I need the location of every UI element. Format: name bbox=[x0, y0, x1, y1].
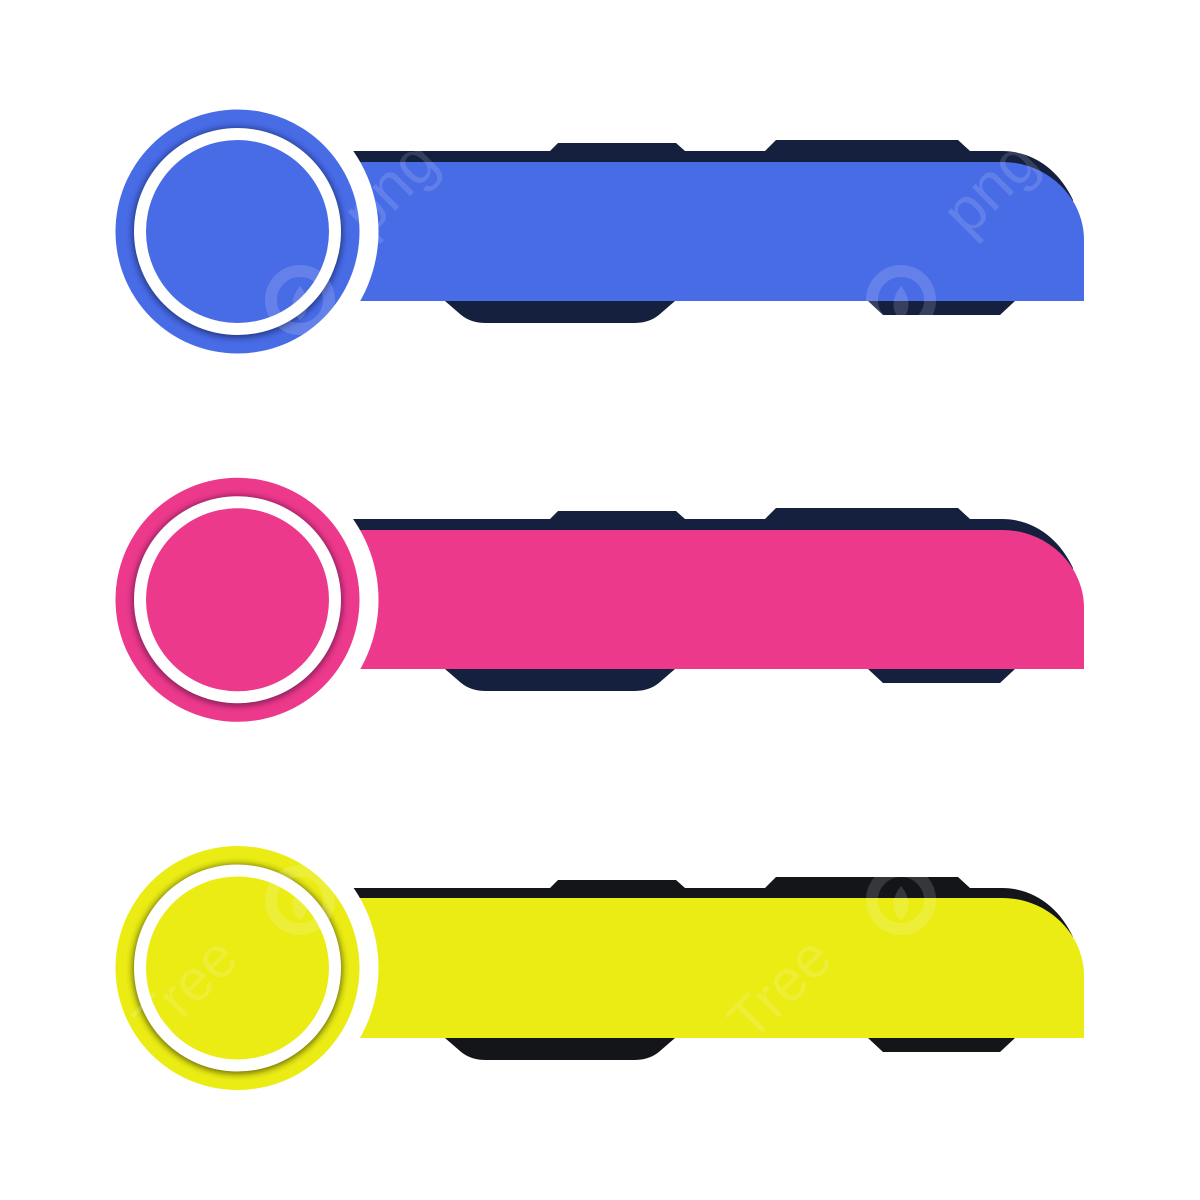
dark backing shape bbox=[340, 508, 1073, 691]
white ring bbox=[134, 864, 341, 1072]
white gap around badge bbox=[96, 459, 378, 741]
white gap around badge bbox=[96, 827, 378, 1109]
white ring bbox=[134, 496, 341, 703]
ribbon bbox=[340, 162, 1084, 301]
dark backing shape bbox=[340, 877, 1073, 1060]
watermark text: png left: png bbox=[329, 126, 451, 248]
inner ring shadow bbox=[132, 496, 342, 706]
watermark logo: yellow right bbox=[872, 871, 930, 929]
outer circle bbox=[116, 846, 360, 1090]
watermark logo: yellow left bbox=[271, 871, 329, 929]
banner: yellow bbox=[96, 827, 1084, 1109]
watermark logo: blue left bbox=[271, 271, 329, 329]
inner circle bbox=[146, 876, 329, 1060]
banner: blue bbox=[96, 90, 1084, 372]
dark backing shape bbox=[340, 140, 1073, 323]
ribbon bbox=[340, 898, 1084, 1038]
inner ring shadow bbox=[132, 864, 342, 1074]
watermark text: tree left: Tree bbox=[121, 924, 250, 1053]
outer circle bbox=[116, 110, 360, 354]
outer circle bbox=[116, 478, 360, 722]
inner circle bbox=[146, 140, 329, 323]
watermark logo: blue right bbox=[872, 271, 930, 329]
inner circle bbox=[146, 508, 329, 691]
watermark overlay bbox=[121, 126, 1051, 1053]
inner ring shadow bbox=[132, 128, 342, 338]
white gap around badge bbox=[96, 90, 378, 372]
ribbon bbox=[340, 530, 1084, 669]
white ring bbox=[134, 128, 341, 335]
banner: pink bbox=[96, 459, 1084, 741]
watermark text: png right: png bbox=[929, 126, 1051, 248]
watermark text: tree right: Tree bbox=[715, 924, 844, 1053]
